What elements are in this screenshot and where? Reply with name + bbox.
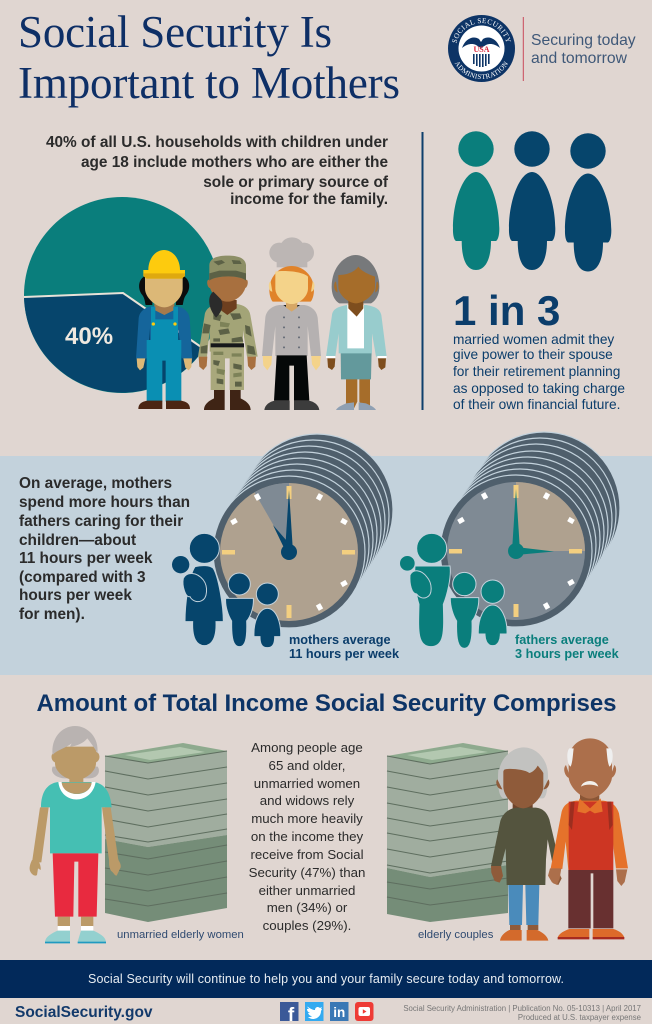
text block: among people age 65: men (34%) or (267, 900, 348, 915)
text block: married women: as opposed to taking charge (453, 381, 625, 396)
figure: elderly woman of couple (491, 747, 562, 941)
label: mothers average: mothers average (289, 633, 391, 647)
figure: unmarried elderly woman (30, 726, 121, 943)
banner: closing message: Social Security will continue to help you and your family secure today and tomorrow. (88, 972, 564, 986)
title: Social Security Is (18, 7, 332, 57)
tagline: and tomorrow (531, 50, 628, 67)
text block: among people age 65: and widows rely (260, 793, 355, 808)
logo: Social Security Administration seal: USA (473, 45, 490, 54)
banner: closing message (0, 960, 652, 998)
text block: married women: married women admit they (453, 332, 614, 347)
logo: Social Security Administration seal: SOCIAL SECURITY (452, 18, 511, 44)
text block: mothers caring hours (19, 475, 190, 623)
text block: 40% of households (46, 134, 389, 208)
clock: mothers, 11 hours (213, 434, 393, 628)
logo divider (523, 17, 524, 81)
label: fathers average: fathers average (515, 633, 609, 647)
icon: facebook (280, 1002, 298, 1024)
text block: 40% of households: 40% of all U.S. households with children under (46, 134, 388, 151)
text block: married women (453, 332, 625, 412)
text block: 40% of households: income for the family. (230, 191, 388, 208)
text block: among people age 65: on the income they (251, 829, 364, 844)
title (18, 7, 400, 108)
footer: publication info: Produced at U.S. taxpayer expense (518, 1013, 641, 1022)
text block: mothers caring hours: for men). (19, 606, 85, 623)
text block: among people age 65: much more heavily (251, 811, 363, 826)
text block: 40% of households: age 18 include mothers who are either the (81, 154, 388, 171)
text block: mothers caring hours: fathers caring for their (19, 513, 183, 530)
text block: among people age 65: either unmarried (259, 883, 355, 898)
divider: vertical rule (422, 132, 424, 410)
text block: mothers caring hours: (compared with 3 (19, 569, 146, 586)
figure: elderly man of couple (548, 738, 628, 939)
icon: twitter (305, 1002, 324, 1021)
text block: married women: of their own financial future. (453, 397, 620, 412)
text block: mothers caring hours: children—about (19, 532, 136, 549)
icon: mother with children (172, 533, 281, 648)
label: fathers average: 3 hours per week (515, 647, 620, 661)
statistic: 1 in 3: 1 in 3 (453, 287, 560, 334)
clock: fathers, 3 hours (440, 432, 620, 627)
text block: mothers caring hours: 11 hours per week (19, 550, 153, 567)
text block: among people age 65: couples (29%). (263, 918, 351, 933)
money stack: elderly couples, 29% (387, 743, 508, 922)
heading: amount of total income: Amount of Total Income Social Security Comprises (36, 690, 616, 717)
icon: youtube (355, 1002, 374, 1021)
icon: linkedin: in (333, 1005, 345, 1020)
footer: publication info (403, 1004, 641, 1022)
text block: mothers caring hours: hours per week (19, 587, 132, 604)
pie chart: 40% (24, 197, 220, 393)
icon: three women, one highlighted (453, 131, 611, 272)
icon: linkedin (330, 1002, 348, 1021)
pie chart: 40%: 40% (65, 323, 113, 350)
figure: construction worker mother (136, 250, 192, 409)
label: unmarried elderly women: unmarried elderly women (117, 929, 244, 941)
figure: business mother (326, 255, 387, 410)
tagline (531, 32, 636, 67)
text block: among people age 65: 65 and older, (269, 758, 345, 773)
title: Important to Mothers (18, 58, 400, 108)
text block: among people age 65: Among people age (251, 740, 363, 755)
footer: website: SocialSecurity.gov (15, 1004, 153, 1021)
text block: married women: give power to their spouse (453, 347, 613, 362)
text block: among people age 65: unmarried women (254, 776, 360, 791)
text block: among people age 65 (249, 740, 365, 933)
tagline: Securing today (531, 32, 636, 49)
text block: 40% of households: sole or primary source of (203, 174, 389, 191)
footer: publication info: Social Security Administration | Publication No. 05-10313 | April 2017 (403, 1004, 641, 1013)
logo: Social Security Administration seal: ADMINISTRATION (454, 61, 508, 79)
icon: father with children (400, 533, 507, 648)
label: mothers average: 11 hours per week (289, 647, 400, 661)
text block: mothers caring hours: spend more hours than (19, 494, 190, 511)
logo: Social Security Administration seal (448, 15, 515, 82)
money stack: unmarried elderly women, 47% (105, 743, 227, 922)
figure: chef mother (262, 237, 321, 410)
text block: among people age 65: Security (47%) than (249, 865, 365, 880)
band: caring hours section background (0, 456, 652, 675)
text block: among people age 65: receive from Social (250, 847, 364, 862)
text block: married women: for their retirement planning (453, 364, 620, 379)
text block: mothers caring hours: On average, mothers (19, 475, 172, 492)
label: fathers average (515, 633, 620, 661)
figure: soldier mother (198, 256, 258, 410)
label: elderly couples: elderly couples (418, 929, 494, 941)
label: mothers average (289, 633, 400, 661)
